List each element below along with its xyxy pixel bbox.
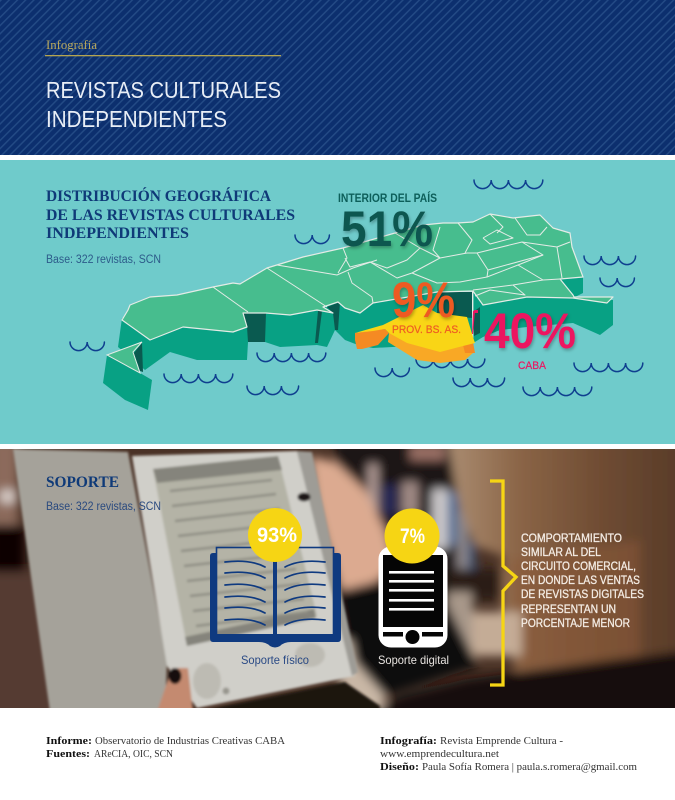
heading: geographic distribution <box>46 188 295 242</box>
icon: open book <box>210 548 341 648</box>
panel: geographic distribution <box>0 160 675 444</box>
province borders <box>213 214 570 312</box>
callout text: CIRCUITO COMERCIAL, <box>521 561 636 573</box>
heading: geographic distribution: DISTRIBUCIÓN GEOGRÁFICA <box>46 188 272 205</box>
footer credits: report and sources: Observatorio de Industrias Creativas CABA <box>95 735 285 747</box>
callout text <box>521 533 644 630</box>
stat: CABA 40%: 40% <box>484 303 576 359</box>
bracket <box>490 481 516 685</box>
title: INDEPENDIENTES <box>46 106 227 132</box>
footer credits: infographic and design: Diseño: <box>380 761 419 773</box>
panel: soporte <box>0 440 675 720</box>
callout text: REPRESENTAN UN <box>521 604 616 616</box>
background photo: reader holding an e-book <box>0 440 675 720</box>
stat: interior 51%: 51% <box>341 201 433 257</box>
label: soporte digital: Soporte digital <box>378 653 449 667</box>
map side shadows <box>243 292 480 343</box>
footer credits: report and sources: Fuentes: <box>46 748 90 760</box>
heading: geographic distribution: INDEPENDIENTES <box>46 225 189 242</box>
badge: 7%: 7% <box>400 525 425 548</box>
footer credits: infographic and design <box>380 735 637 773</box>
callout text: PORCENTAJE MENOR <box>521 618 630 630</box>
title: REVISTAS CULTURALES <box>46 77 281 103</box>
footer credits: infographic and design: Infografía: <box>380 735 437 747</box>
icon: smartphone <box>380 548 446 646</box>
panel: header <box>0 0 675 155</box>
stat: province 9%: 9% <box>392 272 455 328</box>
heading: soporte: SOPORTE <box>46 474 119 491</box>
label: soporte físico: Soporte físico <box>241 653 309 667</box>
footer credits: report and sources <box>46 735 285 760</box>
waves <box>70 180 643 396</box>
footer credits: infographic and design: www.emprendecultura.net <box>380 748 499 760</box>
province of Buenos Aires highlight <box>355 305 475 363</box>
badge: 93%: 93% <box>257 524 297 547</box>
stat: CABA 40%: CABA <box>518 360 547 372</box>
stat: province 9%: PROV. BS. AS. <box>392 324 461 336</box>
footer credits: infographic and design: Paula Sofía Romera | paula.s.romera@gmail.com <box>422 761 637 773</box>
stat: interior 51%: INTERIOR DEL PAÍS <box>338 190 437 205</box>
title <box>46 77 281 132</box>
footer credits: report and sources: AReCIA, OIC, SCN <box>94 748 173 760</box>
badge: 93% <box>248 508 302 562</box>
map top surface <box>122 214 613 340</box>
callout text: COMPORTAMIENTO <box>521 533 622 545</box>
header label: Infografía: Infografía <box>46 38 97 52</box>
base note: Base: 322 revistas, SCN <box>46 254 161 266</box>
footer credits: report and sources: Informe: <box>46 735 92 747</box>
map side walls <box>118 292 613 370</box>
CABA marker <box>472 310 478 334</box>
base note: Base: 322 revistas, SCN <box>46 501 161 513</box>
Tierra del Fuego <box>103 342 152 410</box>
badge: 7% <box>384 508 440 564</box>
footer credits: infographic and design: Revista Emprende Cultura - <box>440 735 563 747</box>
callout text: DE REVISTAS DIGITALES <box>521 589 644 601</box>
callout text: SIMILAR AL DEL <box>521 547 602 559</box>
map of Argentina <box>103 214 613 410</box>
callout text: EN DONDE LAS VENTAS <box>521 575 640 587</box>
heading: geographic distribution: DE LAS REVISTAS CULTURALES <box>46 207 295 224</box>
